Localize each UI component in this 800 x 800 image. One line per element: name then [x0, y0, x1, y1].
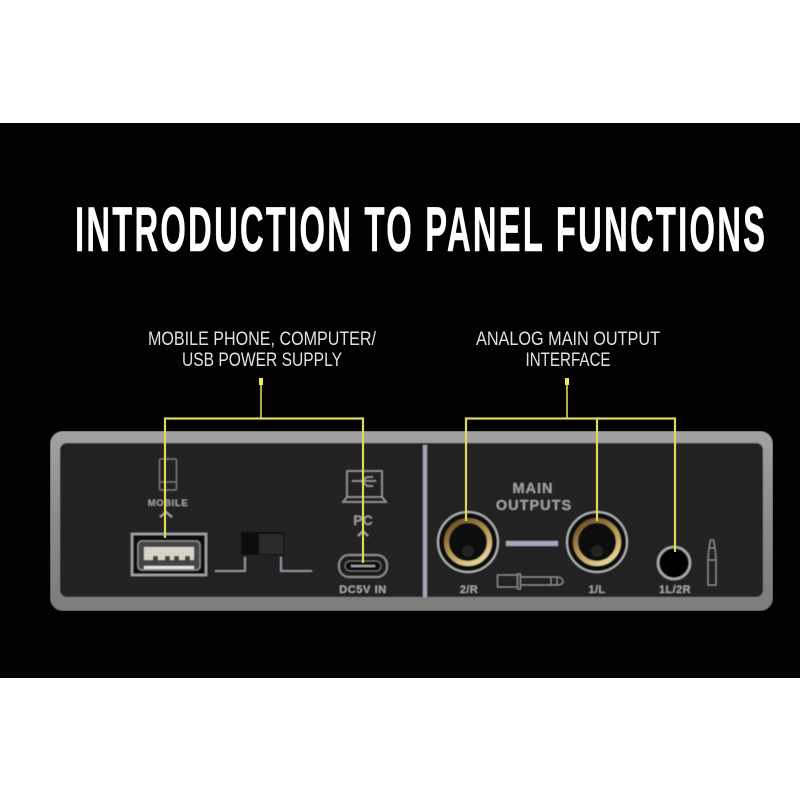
jack 2/R	[438, 512, 498, 572]
callout label: analog output: INTERFACE	[526, 350, 610, 371]
dark faceplate	[60, 443, 763, 597]
callout label: USB power: MOBILE PHONE, COMPUTER/	[148, 329, 377, 350]
callout label: USB power	[148, 329, 377, 371]
panel divider	[423, 445, 427, 597]
icon: mobile phone	[160, 459, 176, 490]
device rear panel	[50, 431, 773, 611]
MOBILE label: MOBILE	[148, 498, 188, 509]
icon: laptop USB	[343, 471, 386, 502]
black background panel	[0, 123, 800, 678]
port labels: 1L/2R	[659, 584, 691, 596]
MAIN OUTPUTS label	[496, 481, 572, 514]
DC5V IN label: DC5V IN	[339, 584, 387, 596]
USB-A port	[132, 534, 206, 575]
connector lines: USB group	[165, 378, 363, 563]
jack 1L/2R	[658, 547, 690, 579]
jack 1/L	[567, 512, 627, 572]
title: INTRODUCTION TO PANEL FUNCTIONS	[75, 195, 765, 265]
callout label: analog output: ANALOG MAIN OUTPUT	[476, 329, 660, 350]
port labels: 1/L	[588, 584, 606, 596]
MAIN OUTPUTS label: MAIN	[512, 481, 554, 497]
arrow: mobile up	[160, 512, 172, 517]
callout label: analog output	[476, 329, 660, 371]
slide switch	[215, 532, 312, 571]
MAIN OUTPUTS label: OUTPUTS	[496, 498, 572, 514]
arrow: PC up	[358, 531, 368, 536]
metal rim	[50, 431, 773, 611]
USB-C port	[339, 555, 387, 577]
port labels: 2/R	[460, 584, 478, 596]
connector bar	[506, 541, 558, 546]
callout label: USB power: USB POWER SUPPLY	[182, 350, 342, 371]
port labels	[460, 584, 691, 596]
icon: 6.35mm plug	[498, 574, 563, 589]
icon: 3.5mm plug	[708, 540, 716, 585]
PC label: PC	[353, 512, 373, 528]
connector lines: analog group	[466, 378, 675, 552]
